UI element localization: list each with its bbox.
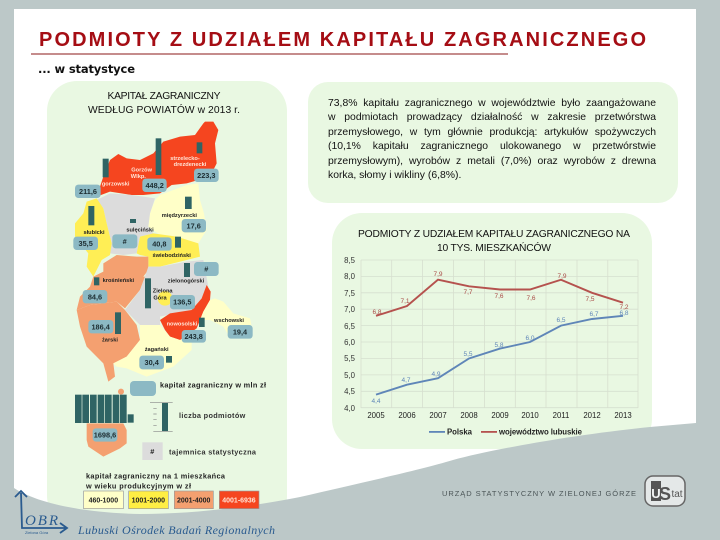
county names: Zielona bbox=[153, 289, 173, 295]
county names: drezdenecki bbox=[174, 162, 207, 168]
data labels: Polska: 4,4 bbox=[371, 398, 381, 405]
panel: map background bbox=[47, 81, 287, 526]
value labels: 186,4 bbox=[91, 322, 111, 331]
data labels: Polska: 4,9 bbox=[431, 371, 441, 378]
data labels: Polska: 4,7 bbox=[401, 377, 411, 384]
legend: entities label: liczba podmiotów bbox=[179, 411, 246, 420]
logo: LOBR bbox=[15, 491, 67, 535]
value labels: 40,8 bbox=[152, 240, 166, 249]
text block: paragraph: przemysłowego, w tym głównie produkcją: artykułów spożywczych bbox=[328, 127, 656, 138]
legend: secrecy box: # bbox=[150, 447, 154, 456]
y axis labels: 4,0 bbox=[344, 404, 356, 413]
y axis labels: 7,5 bbox=[344, 289, 356, 298]
county names: zielonogórski bbox=[168, 279, 205, 285]
county names: nowosolski bbox=[167, 321, 198, 327]
legend: class 2001-4000 bbox=[174, 491, 213, 509]
value labels: 35,5 bbox=[79, 239, 93, 248]
legend: class 2001-4000: 2001-4000 bbox=[177, 497, 210, 504]
value labels: 30,4 bbox=[145, 358, 160, 367]
data labels: Polska: 6,7 bbox=[589, 311, 599, 318]
chart legend: Polska bbox=[447, 428, 473, 436]
y axis labels: 8,0 bbox=[344, 272, 356, 281]
data labels: lubuskie: 7,9 bbox=[557, 273, 567, 280]
text block: paragraph: (10,1% kapitału zagranicznego ulokowanego w przetwórstwie bbox=[328, 141, 656, 152]
region: nowosolski bbox=[160, 285, 211, 340]
x axis labels bbox=[367, 411, 632, 420]
logo: US stat: U bbox=[651, 486, 661, 501]
region: north red counties bbox=[97, 122, 218, 197]
chart title: 10 TYS. MIESZKAŃCÓW bbox=[437, 241, 551, 254]
series: województwo lubuskie bbox=[376, 280, 623, 316]
value labels: 211,6 bbox=[79, 187, 97, 196]
subtitle: ... w statystyce bbox=[38, 62, 135, 76]
data labels: Polska: 6,5 bbox=[556, 317, 566, 324]
county names: Gorzów bbox=[131, 167, 153, 173]
county names: Góra bbox=[153, 295, 167, 301]
y axis labels: 5,5 bbox=[344, 354, 356, 363]
text block: paragraph: w podmiotach prowadzący działalność w zakresie przetwórstwa bbox=[328, 112, 656, 123]
data labels: Polska: 5,5 bbox=[463, 351, 473, 358]
text block: paragraph: przemysłowym), wyrobów z metali (7,0%) oraz wyrobów z drewna bbox=[328, 156, 656, 167]
data labels: Polska: 6,0 bbox=[525, 335, 535, 342]
county names: żarski bbox=[102, 337, 118, 343]
county names: Wlkp. bbox=[131, 174, 146, 180]
value labels: # bbox=[204, 265, 208, 274]
panel: chart background bbox=[332, 213, 652, 449]
map heading: KAPITAŁ ZAGRANICZNY bbox=[108, 91, 221, 102]
title underline bbox=[31, 54, 508, 55]
line chart bbox=[344, 256, 638, 436]
logo: US stat: S bbox=[659, 484, 671, 504]
data labels: lubuskie: 7,6 bbox=[526, 295, 536, 302]
value boxes bbox=[73, 169, 253, 442]
y axis labels: 4,5 bbox=[344, 387, 356, 396]
logo: US stat: tat bbox=[671, 489, 683, 500]
y axis labels: 5,0 bbox=[344, 371, 356, 380]
legend: per capita title: kapitał zagraniczny na 1 mieszkańca bbox=[86, 472, 226, 481]
region: zielonogórski bbox=[125, 260, 208, 325]
y axis labels: 7,0 bbox=[344, 305, 356, 314]
region: wschowski bbox=[200, 298, 252, 335]
data labels: lubuskie: 6,8 bbox=[372, 309, 382, 316]
y axis labels: 6,5 bbox=[344, 322, 356, 331]
x axis labels: 2005 bbox=[367, 411, 385, 420]
text block: paragraph: korka, słomy i wikliny (6,8%). bbox=[328, 170, 461, 181]
value labels: 243,8 bbox=[184, 332, 203, 341]
legend: capital label: kapitał zagraniczny w mln zł bbox=[160, 381, 266, 390]
region: krośnieński bbox=[77, 255, 148, 310]
value labels: 1698,6 bbox=[94, 431, 116, 440]
region: żagański bbox=[113, 325, 192, 377]
value labels: 448,2 bbox=[145, 181, 164, 190]
chart title bbox=[358, 229, 630, 254]
region: międzyrzecki bbox=[148, 183, 207, 243]
value labels: 136,5 bbox=[173, 298, 192, 307]
value labels: 19,4 bbox=[233, 327, 248, 336]
text block: paragraph: 73,8% kapitału zagranicznego w województwie było zaangażowane bbox=[328, 98, 656, 109]
legend: class 1001-2000: 1001-2000 bbox=[132, 497, 165, 504]
x axis labels: 2011 bbox=[553, 411, 569, 420]
county names: żagański bbox=[145, 347, 169, 353]
legend: entities bar sample bbox=[150, 403, 173, 431]
y axis labels: 6,0 bbox=[344, 338, 356, 347]
bottom grey swoosh bbox=[0, 423, 720, 540]
x axis labels: 2006 bbox=[398, 411, 416, 420]
text block: paragraph bbox=[328, 98, 656, 181]
value labels bbox=[79, 171, 248, 440]
y axis labels bbox=[344, 256, 356, 413]
x axis labels: 2010 bbox=[521, 411, 539, 420]
data labels: lubuskie: 7,5 bbox=[585, 296, 595, 303]
chart title: PODMIOTY Z UDZIAŁEM KAPITAŁU ZAGRANICZNEGO NA bbox=[358, 229, 630, 240]
legend: secrecy label: tajemnica statystyczna bbox=[169, 447, 257, 456]
region: słubicki bbox=[75, 198, 112, 277]
legend: class 4001-6936: 4001-6936 bbox=[222, 497, 256, 504]
legend: class 460-1000 bbox=[84, 491, 123, 509]
data labels: lubuskie: 7,9 bbox=[433, 271, 443, 278]
x axis labels: 2009 bbox=[491, 411, 509, 420]
data labels: Polska: 6,8 bbox=[619, 310, 629, 317]
value labels: 84,6 bbox=[88, 292, 102, 301]
county names: gorzowski bbox=[102, 181, 130, 187]
county names: krośnieński bbox=[103, 278, 134, 284]
data labels: Polska bbox=[371, 310, 629, 405]
map heading bbox=[88, 91, 240, 116]
county names: wschowski bbox=[213, 318, 244, 324]
region: żarski bbox=[77, 302, 140, 382]
legend region shape bbox=[87, 423, 127, 457]
logo: LOBR: OBR bbox=[25, 513, 58, 529]
legend: class 460-1000: 460-1000 bbox=[89, 497, 118, 504]
chart legend bbox=[429, 428, 583, 436]
x axis labels: 2012 bbox=[583, 411, 601, 420]
series: Polska bbox=[376, 316, 623, 395]
legend: class 4001-6936 bbox=[219, 491, 259, 509]
title: PODMIOTY Z UDZIAŁEM KAPITAŁU ZAGRANICZNEGO bbox=[39, 29, 646, 51]
logo: US stat bbox=[645, 476, 685, 506]
legend region peak bbox=[118, 389, 124, 395]
value labels: # bbox=[123, 237, 127, 246]
county names bbox=[83, 156, 244, 353]
data labels: lubuskie: 7,7 bbox=[463, 289, 473, 296]
legend: per capita title bbox=[85, 472, 226, 490]
logo: LOBR: Zielona Góra bbox=[25, 530, 49, 535]
y axis labels: 8,5 bbox=[344, 256, 356, 265]
panel: text background bbox=[308, 82, 678, 203]
data labels: lubuskie: 7,2 bbox=[619, 304, 629, 311]
county names: międzyrzecki bbox=[162, 213, 197, 219]
value labels: 223,3 bbox=[197, 171, 216, 180]
x axis labels: 2013 bbox=[614, 411, 632, 420]
x axis labels: 2008 bbox=[460, 411, 478, 420]
data labels: Polska: 5,8 bbox=[494, 342, 504, 349]
county bars bbox=[75, 138, 205, 423]
data labels: lubuskie: 7,1 bbox=[400, 298, 410, 305]
legend: secrecy box bbox=[142, 442, 163, 460]
county names: słubicki bbox=[83, 230, 105, 236]
legend: class 1001-2000 bbox=[129, 491, 168, 509]
map of counties with legend bbox=[73, 122, 266, 509]
region: sulęciński bbox=[97, 193, 155, 255]
map heading: WEDŁUG POWIATÓW w 2013 r. bbox=[88, 103, 240, 116]
county names: sulęciński bbox=[126, 227, 154, 233]
value labels: 17,6 bbox=[187, 221, 201, 230]
region: świebodziński bbox=[137, 233, 200, 267]
x axis labels: 2007 bbox=[429, 411, 447, 420]
data labels: lubuskie bbox=[372, 271, 629, 316]
logo text: Lubuski Ośrodek Badań Regionalnych bbox=[77, 523, 275, 537]
footer: statistical office: URZĄD STATYSTYCZNY W ZIELONEJ GÓRZE bbox=[442, 489, 636, 498]
data labels: lubuskie: 7,6 bbox=[494, 293, 504, 300]
county names: strzelecko- bbox=[170, 156, 200, 162]
legend: per capita title: w wieku produkcyjnym w zł bbox=[85, 481, 191, 490]
chart legend: województwo lubuskie bbox=[498, 428, 583, 436]
county names: świebodziński bbox=[152, 253, 191, 259]
region: Zielona Góra bbox=[158, 291, 172, 306]
